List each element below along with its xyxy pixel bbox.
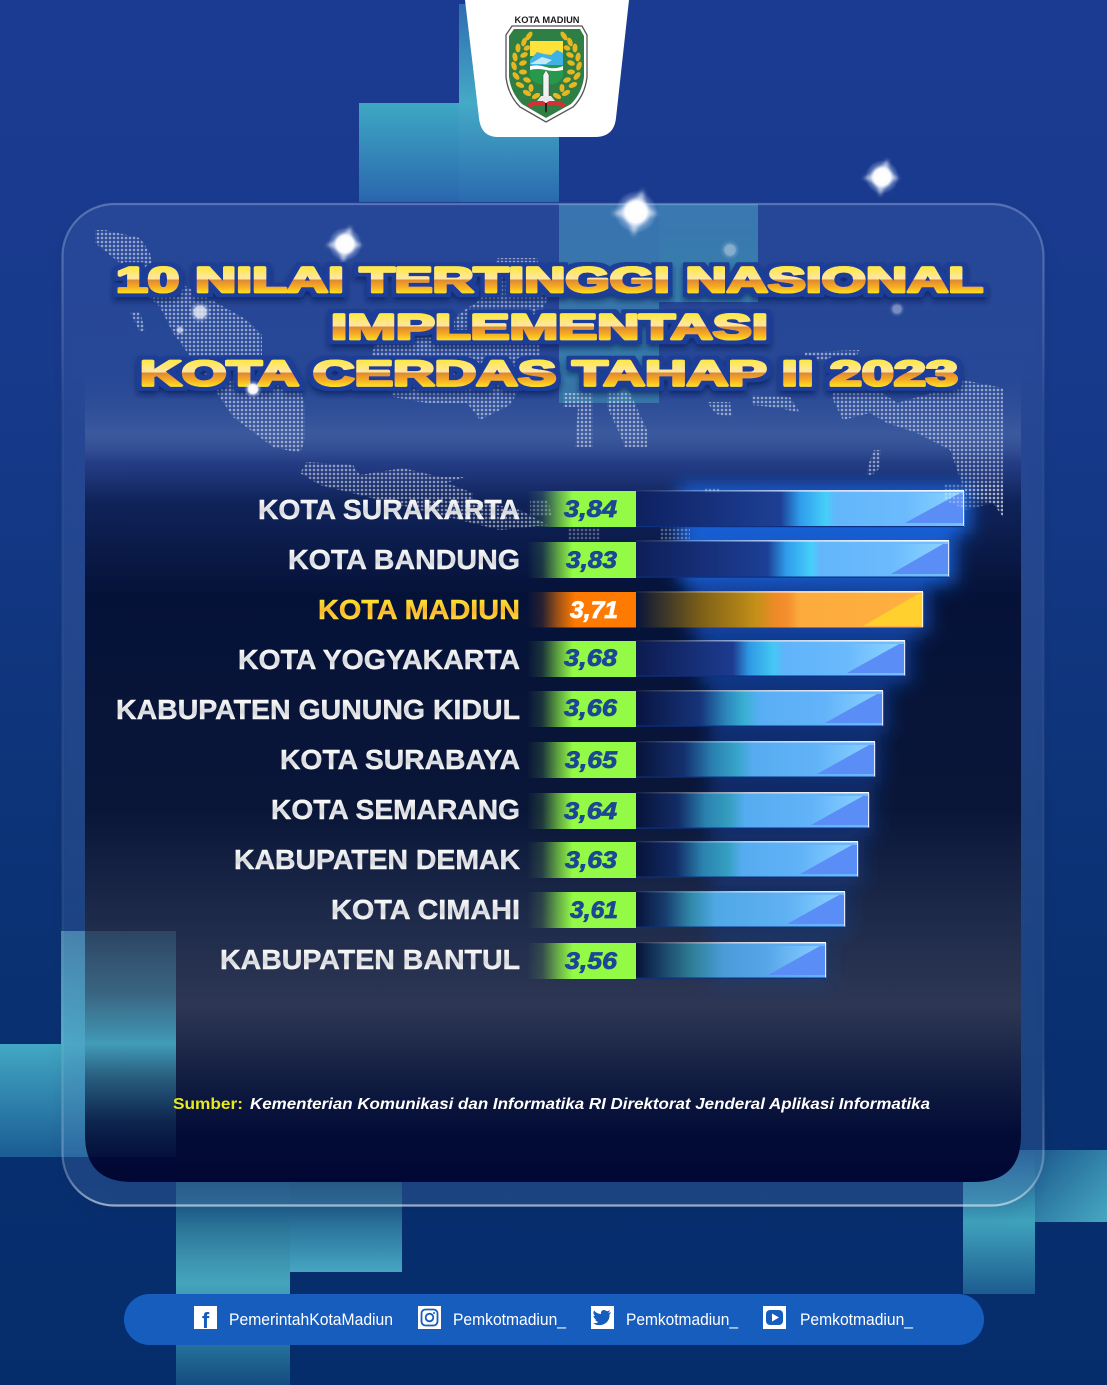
row: Kota Bandung (288, 540, 949, 578)
source note: Sumber: (173, 1096, 243, 1113)
row: Kota Surakarta: 3,84 (564, 496, 617, 523)
row: Kabupaten Bantul (220, 942, 826, 979)
row: Kota Yogyakarta (238, 640, 905, 677)
twitter handle: Pemkotmadiun_ (626, 1311, 739, 1329)
youtube handle: Pemkotmadiun_ (800, 1311, 914, 1329)
icon: city coat of arms (506, 26, 587, 122)
logo text: KOTA MADIUN (514, 15, 580, 25)
title: IMPLEMENTASI (331, 307, 768, 347)
social media bar (124, 1294, 984, 1345)
icon: twitter (591, 1306, 614, 1329)
map dots over bars (530, 484, 1003, 541)
row: Kabupaten Gunung Kidul: KABUPATEN GUNUNG KIDUL (116, 694, 520, 725)
title: KOTA CERDAS TAHAP II 2023 (140, 354, 958, 394)
row: Kabupaten Bantul: 3,56 (565, 948, 618, 975)
row: Kabupaten Demak (234, 841, 858, 878)
map of Indonesia (dotted) (95, 230, 1003, 530)
row: Kabupaten Demak: 3,63 (565, 847, 618, 874)
panel: inner dark card (85, 225, 1021, 1182)
icon: youtube (763, 1306, 786, 1329)
row: Kota Yogyakarta: KOTA YOGYAKARTA (238, 644, 520, 675)
row: Kota Bandung: 3,83 (566, 547, 618, 574)
sparkles (175, 153, 905, 335)
logo tab (465, 0, 629, 137)
facebook handle: PemerintahKotaMadiun (229, 1311, 393, 1329)
row: Kabupaten Bantul: KABUPATEN BANTUL (220, 944, 520, 975)
row: Kota Surakarta: KOTA SURAKARTA (258, 494, 520, 525)
row: Kota Surakarta (258, 490, 964, 527)
row: Kota Madiun (highlight): 3,71 (570, 597, 618, 624)
row: Kota Madiun (highlight) (318, 591, 923, 628)
row: Kota Semarang: KOTA SEMARANG (271, 794, 520, 825)
row: Kota Semarang: 3,64 (564, 798, 617, 825)
bar glows (680, 486, 970, 986)
row: Kota Surabaya: KOTA SURABAYA (280, 744, 520, 775)
row: Kabupaten Demak: KABUPATEN DEMAK (234, 844, 520, 875)
row: Kota Semarang (271, 792, 869, 829)
row: Kota Bandung: KOTA BANDUNG (288, 544, 520, 575)
row: Kota Cimahi (331, 891, 845, 928)
title: 10 NILAI TERTINGGI NASIONAL (116, 260, 983, 300)
row: Kota Yogyakarta: 3,68 (564, 645, 618, 672)
source note: Kementerian Komunikasi dan Informatika RI Direktorat Jenderal Aplikasi Informatika (250, 1096, 930, 1113)
row: Kabupaten Gunung Kidul: 3,66 (564, 695, 618, 722)
icon: facebook (194, 1306, 217, 1333)
panel: outer glass frame (62, 204, 1044, 1206)
instagram handle: Pemkotmadiun_ (453, 1311, 567, 1329)
row: Kota Surabaya: 3,65 (565, 747, 618, 774)
row: Kabupaten Gunung Kidul (116, 690, 883, 727)
sparkle over title (244, 380, 262, 398)
icon: facebook: f (202, 1308, 210, 1333)
left square overlay on card (85, 931, 176, 1157)
row: Kota Madiun (highlight): KOTA MADIUN (318, 594, 520, 625)
title (116, 260, 983, 394)
row: Kota Cimahi: KOTA CIMAHI (331, 894, 520, 925)
row: Kota Cimahi: 3,61 (570, 897, 618, 924)
row: Kota Surabaya (280, 741, 875, 778)
icon: instagram (418, 1306, 441, 1329)
